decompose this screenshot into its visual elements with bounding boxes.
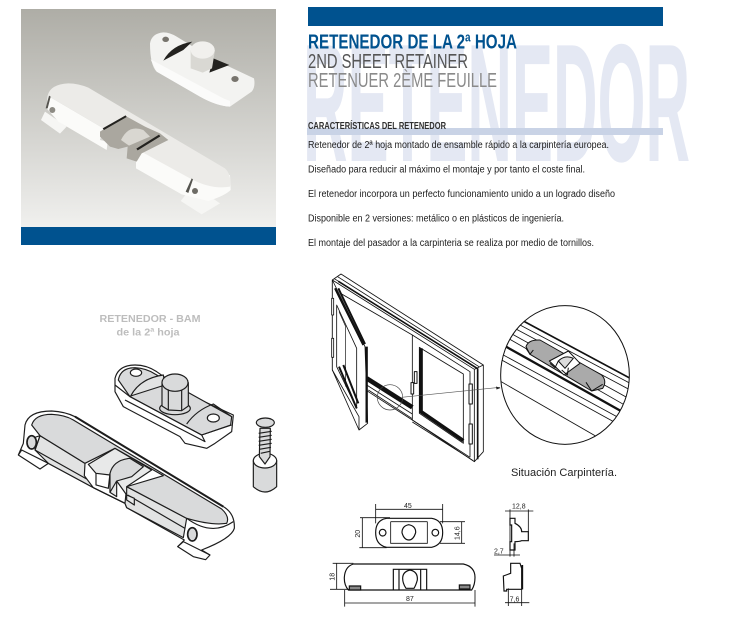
dimension labels front view [329, 573, 414, 603]
text block: characteristics: Diseñado para reducir al máximo el montaje y por tanto el coste final. [308, 164, 585, 176]
photo: long retainer part [41, 83, 231, 214]
text block: characteristics [308, 140, 615, 249]
detail outline [501, 306, 629, 444]
window glazing [421, 348, 463, 441]
line drawing: retainer parts [18, 365, 277, 560]
text block: characteristics: El retenedor incorpora un perfecto funcionamiento unido a un logrado diseño [308, 189, 615, 200]
front view [330, 563, 475, 607]
window carpentry diagram [332, 274, 500, 462]
drawing caption: de la 2ª hoja [116, 326, 180, 338]
dimension labels side views [494, 504, 526, 603]
drawing caption: RETENEDOR - BAM [100, 313, 201, 325]
striker with peg [115, 365, 233, 448]
window frame [332, 274, 483, 462]
dimension labels side views: 12,8 [512, 504, 526, 511]
dimension labels front view: 18 [329, 573, 336, 581]
dimension labels front view: 87 [406, 596, 414, 603]
top view [359, 504, 465, 548]
dimension labels side views: 7,6 [510, 596, 519, 603]
side view upper [494, 509, 533, 557]
hinges and handle [411, 372, 472, 444]
open sash [332, 280, 368, 430]
section heading: CARACTERÍSTICAS DEL RETENEDOR [308, 119, 447, 132]
side view lower [503, 563, 529, 606]
detail retainer [526, 340, 605, 391]
detail rails [500, 321, 633, 437]
arrow head [496, 386, 500, 390]
detail circle [500, 306, 633, 444]
text block: characteristics: Retenedor de 2ª hoja montado de ensamble rápido a la carpintería europea. [308, 140, 609, 151]
dimension labels top view [355, 503, 462, 540]
text block: characteristics: Disponible en 2 versiones: metálico o en plásticos de ingeniería. [308, 214, 564, 224]
dimension labels top view: 45 [404, 503, 412, 510]
section band [307, 128, 663, 135]
dimension drawings [329, 503, 533, 607]
panel: product photo [21, 9, 276, 245]
subtitle french: RETENUER 2ÈME FEUILLE [308, 69, 497, 92]
long retainer [18, 411, 234, 560]
subtitle english: 2ND SHEET RETAINER [308, 51, 468, 73]
photo background [21, 9, 276, 227]
caption: carpentry situation: Situación Carpintería. [511, 467, 617, 479]
drawing caption [100, 313, 201, 338]
dimension labels side views: 2,7 [494, 549, 504, 556]
lower rail with retainer [367, 378, 412, 419]
dimension labels top view: 14,6 [455, 526, 462, 540]
dimension labels top view: 20 [355, 530, 362, 538]
locator circle [377, 385, 403, 410]
screw and barrel [253, 418, 277, 492]
photo caption band [21, 227, 276, 245]
header blue bar [308, 7, 663, 26]
text block: characteristics: El montaje del pasador a la carpinteria se realiza por medio de tornillos. [308, 238, 594, 249]
title: RETENEDOR DE LA 2ª HOJA [308, 30, 517, 54]
photo: peg striker part [150, 32, 254, 107]
arrow to detail [402, 387, 500, 397]
